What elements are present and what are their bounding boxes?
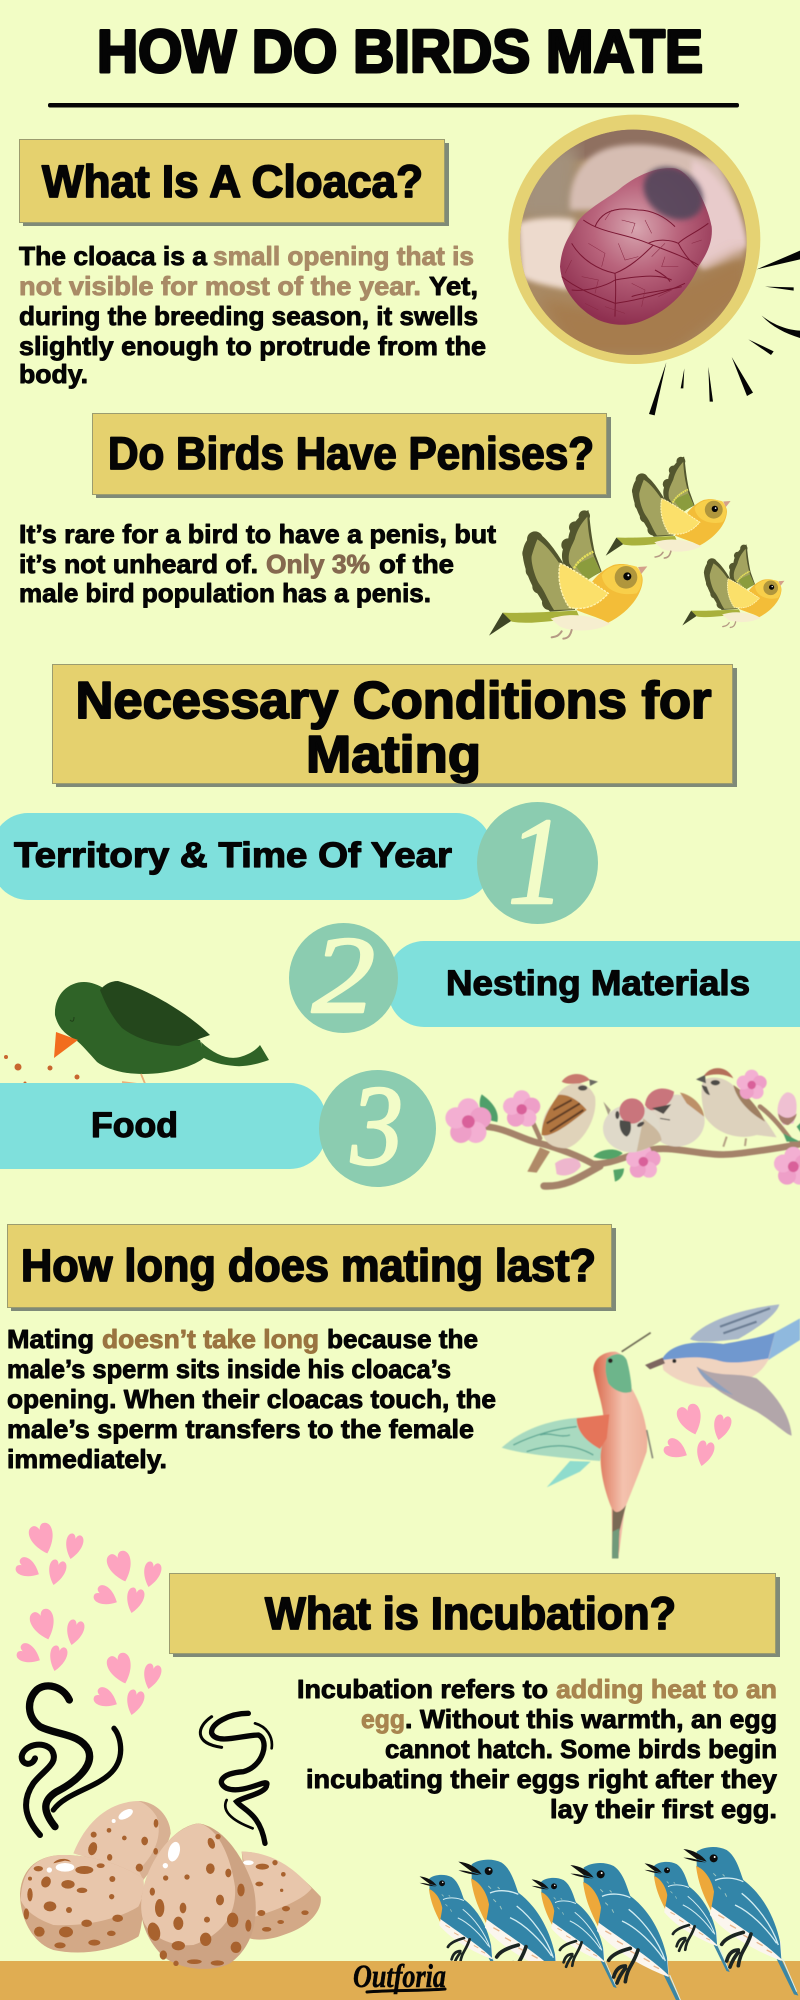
text block: cloaca description [19,241,486,389]
heading: Do Birds Have Penises? [92,414,611,498]
text block: cloaca description: Yet, [429,271,478,301]
text block: cloaca description: small opening that is [213,241,474,271]
text block: penis rarity: It’s rare for a bird to have a penis, but [19,519,496,549]
heading: Do Birds Have Penises?: Do Birds Have Penises? [108,428,594,479]
condition 3: food [0,1062,436,1189]
text block: mating duration: Mating [7,1324,94,1354]
text block: mating duration: immediately. [7,1444,167,1474]
text block: mating duration: opening. When their cloacas touch, the [7,1384,496,1414]
hearts near hummingbird [662,1402,733,1468]
blue birds in front of footer [532,1847,798,2000]
text block: incubation description: incubating their eggs right after they [306,1764,778,1794]
illustration: hummingbird and blue bird [502,1304,800,1558]
heading: Necessary Conditions for Mating [52,664,737,787]
condition 1: territory and time of year: 1 [508,793,564,930]
heading: What is Incubation? [170,1574,780,1657]
condition 3: food: Food [91,1106,178,1145]
text block: incubation description: . Without this warmth, an egg [405,1704,777,1734]
title: HOW DO BIRDS MATE [97,18,703,85]
text block: incubation description: lay their first egg. [550,1794,777,1824]
heading: How long does mating last?: How long does mating last? [21,1240,596,1291]
text block: cloaca description: The cloaca is a [19,241,208,271]
text block: cloaca description: body. [19,359,88,389]
sparrow 2 and 3 [603,1088,705,1152]
condition 1: territory and time of year [0,793,598,930]
blue bird [645,1304,800,1436]
left egg [20,1855,144,1952]
text block: cloaca description: slightly enough to protrude from the [19,331,486,361]
sparrow 1 [527,1074,598,1173]
photo: cloaca in gold ring [508,115,800,415]
front egg [141,1823,256,1969]
text block: incubation description: cannot hatch. Some birds begin [385,1734,777,1764]
heading: What Is A Cloaca?: What Is A Cloaca? [42,156,423,207]
right egg [242,1852,321,1940]
illustration: sparrows on blossom branch [445,1068,800,1186]
text block: incubation description: Incubation refers to [297,1674,548,1704]
text block: mating duration: male’s sperm transfers to the female [7,1414,474,1444]
text block: mating duration: doesn’t take long [102,1324,319,1354]
text block: penis rarity: of the [379,549,454,579]
steam left [22,1686,121,1835]
text block: mating duration: because the [327,1324,478,1354]
text block: penis rarity: male bird population has a penis. [19,578,431,608]
text block: mating duration: male’s sperm sits inside his cloaca’s [7,1354,451,1384]
illustration: eggs and steam [20,1686,321,1969]
heading: What Is A Cloaca? [20,140,449,226]
top egg [73,1801,171,1880]
text block: penis rarity: it’s not unheard of. [19,549,258,579]
blue birds behind footer [420,1860,573,2000]
heading: Necessary Conditions for Mating: Necessary Conditions for [76,672,712,730]
condition 2: nesting materials: Nesting Materials [446,964,750,1003]
text block: cloaca description: during the breeding season, it swells [19,301,478,331]
rays [649,251,800,415]
illustration: green bird pecking [4,981,269,1091]
steam right [200,1713,272,1843]
text block: mating duration [7,1324,496,1474]
heading: How long does mating last? [8,1224,616,1311]
text block: incubation description: adding heat to an [556,1674,777,1704]
text block: incubation description: egg [361,1704,405,1734]
footer band [0,1961,800,2000]
text block: cloaca description: not visible for most of the year. [19,271,421,301]
text block: penis rarity: Only 3% [266,549,370,579]
text block: incubation description [297,1674,778,1824]
text block: penis rarity [19,519,496,608]
footer logo: Outforia: Outforia [353,1959,446,1995]
condition 3: food: 3 [350,1062,403,1189]
heading: Necessary Conditions for Mating: Mating [306,726,481,784]
sparrow 4 [696,1068,777,1147]
heading: What is Incubation?: What is Incubation? [265,1588,676,1639]
condition 1: territory and time of year: Territory & Time Of Year [14,836,452,875]
hummingbird [502,1333,653,1558]
condition 2: nesting materials: 2 [312,914,375,1036]
condition 2: nesting materials [289,914,800,1036]
illustration: three yellow birds [489,457,784,639]
hearts upper left of incubation [14,1521,163,1717]
